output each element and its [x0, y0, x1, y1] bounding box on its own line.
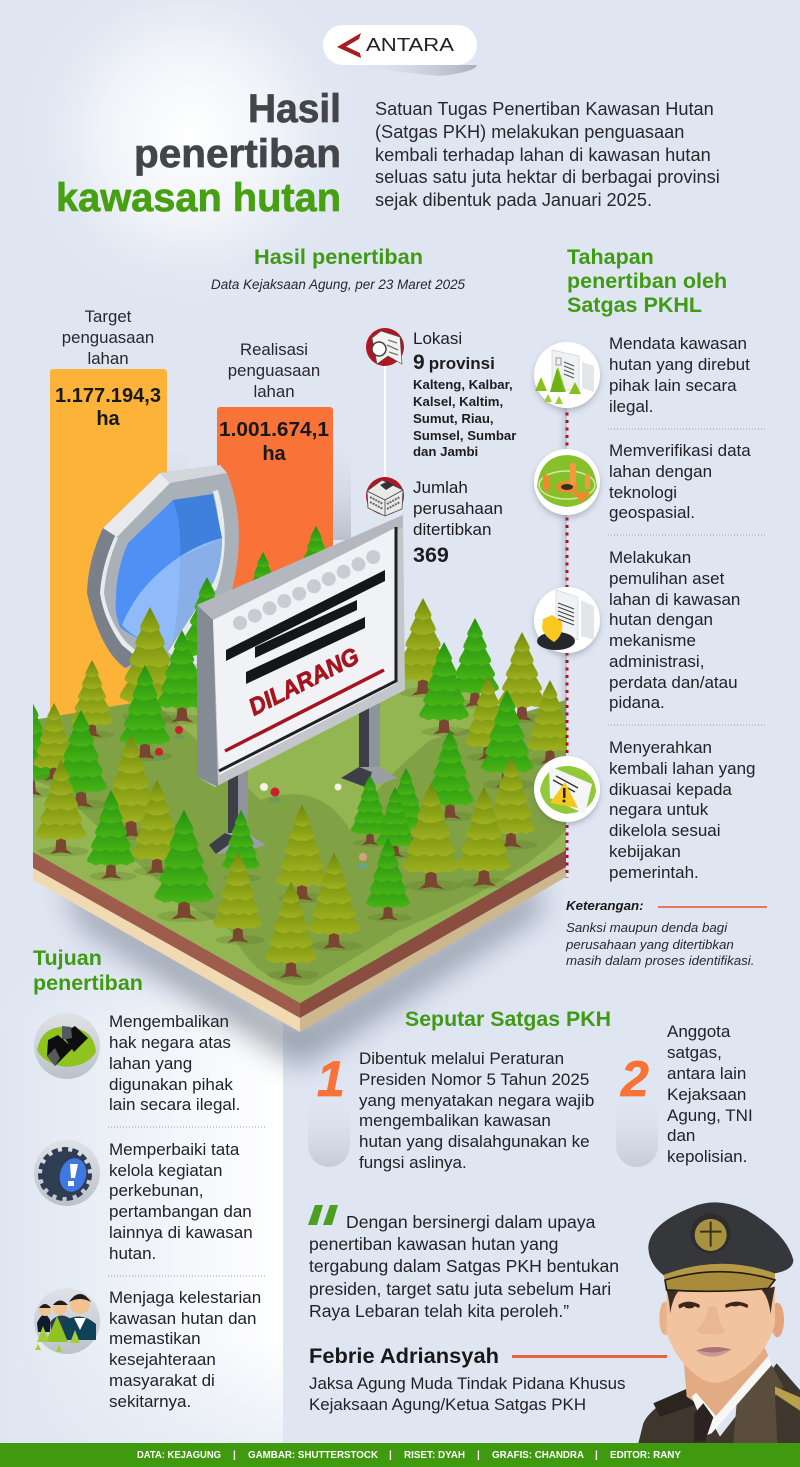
goal text: masyarakat di [109, 1371, 215, 1390]
intro text: (Satgas PKH) melakukan penguasaan [375, 122, 684, 142]
decorative column shadows [167, 405, 567, 735]
step text: Menyerahkan [609, 738, 712, 757]
trees in front of billboard [87, 768, 513, 980]
bar: realisasi: Realisasi [240, 340, 308, 359]
step text: teknologi [609, 483, 677, 502]
bar: target: penguasaan [62, 328, 154, 347]
text: lokasi: dan Jambi [413, 444, 478, 459]
goal text: lain secara ilegal. [109, 1095, 240, 1114]
intro text: seluas satu juta hektar di berbagai provinsi [375, 167, 720, 187]
heading: tujuan: Tujuan [33, 946, 102, 970]
note: keterangan: Keterangan: [566, 898, 644, 913]
icon: people and trees [34, 1288, 100, 1354]
step text: Mendata kawasan [609, 334, 747, 353]
step text: ilegal. [609, 397, 653, 416]
text: lokasi: Lokasi [413, 329, 462, 348]
step 4 [534, 738, 755, 882]
footer bar: RISET: DYAH [404, 1450, 465, 1461]
text: lokasi: Sumut, Riau, [413, 411, 494, 426]
step text: pemerintah. [609, 863, 699, 882]
icon: land blocks [34, 1013, 100, 1079]
goal text: kesejahteraan [109, 1350, 216, 1369]
heading: hasil penertiban: Data Kejaksaan Agung, per 23 Maret 2025 [211, 277, 465, 292]
step 1 [534, 334, 750, 416]
goal 2 [34, 1140, 253, 1263]
fact 1: Presiden Nomor 5 Tahun 2025 [359, 1070, 589, 1089]
bar: target: lahan [87, 349, 129, 368]
note: keterangan: perusahaan yang ditertibkan [565, 937, 734, 952]
footer bar: | [477, 1450, 480, 1461]
fact 2: kepolisian. [667, 1147, 747, 1166]
bar: realisasi [217, 340, 333, 647]
bar: realisasi: penguasaan [228, 361, 320, 380]
quote: tergabung dalam Satgas PKH bentukan [309, 1256, 619, 1276]
step text: perdata dan/atau [609, 673, 738, 692]
dotted timeline [566, 405, 568, 878]
ground shadow [60, 880, 540, 1068]
quote mark [308, 1205, 338, 1225]
icon: company building [366, 477, 404, 516]
speaker [309, 1345, 667, 1414]
step text: kebijakan [609, 842, 681, 861]
illustration: shield [87, 465, 239, 672]
heading: tahapan: Tahapan [567, 245, 654, 269]
icon: map location [366, 328, 404, 366]
heading: tujuan: penertiban [33, 971, 143, 995]
fact 1: mengembalikan kawasan [359, 1111, 551, 1130]
fact 2 [616, 1022, 753, 1167]
bar: target: Target [85, 307, 132, 326]
fact 1: fungsi aslinya. [359, 1153, 467, 1172]
text: lokasi [413, 329, 520, 459]
bar: target: 1.177.194,3 [55, 384, 161, 407]
step text: Melakukan [609, 548, 691, 567]
text: lokasi: Kalteng, Kalbar, [413, 377, 513, 392]
fact 2: Kejaksaan [667, 1085, 746, 1104]
note: keterangan: masih dalam proses identifikasi. [566, 953, 754, 968]
step text: Memverifikasi data [609, 441, 751, 460]
quote: Raya Lebaran telah kita peroleh.” [309, 1301, 569, 1321]
fact 2: 2 [620, 1051, 649, 1107]
text: lokasi: Sumsel, Sumbar [413, 428, 516, 443]
title [56, 87, 341, 220]
goal text: Mengembalikan [109, 1012, 229, 1031]
quote: presiden, target satu juta sebelum Hari [309, 1279, 611, 1299]
flowers [153, 726, 369, 869]
footer bar: | [389, 1450, 392, 1461]
step 3 [534, 548, 740, 712]
goal text: kawasan hutan dan [109, 1309, 256, 1328]
speaker: Kejaksaan Agung/Ketua Satgas PKH [309, 1395, 586, 1414]
bar: realisasi: lahan [253, 382, 295, 401]
text: jumlah perusahaan: Jumlah [413, 478, 468, 497]
bar: realisasi: 1.001.674,1 [219, 418, 329, 441]
goal text: digunakan pihak [109, 1075, 233, 1094]
goal text: perkebunan, [109, 1181, 204, 1200]
logo: Antara: ANTARA [366, 35, 454, 55]
goal text: lainnya di kawasan [109, 1223, 253, 1242]
step 2 [534, 441, 751, 522]
connector line [384, 360, 386, 485]
heading: tahapan: Satgas PKHL [567, 293, 702, 317]
icon: gear and alert [34, 1140, 100, 1206]
footer bar [0, 1443, 800, 1467]
quote [308, 1205, 619, 1321]
logo: Antara [323, 25, 477, 76]
icon: documents and trees [534, 342, 600, 408]
heading: tahapan: penertiban oleh [567, 269, 727, 293]
fact 1 [308, 1049, 594, 1172]
step text: pidana. [609, 693, 665, 712]
icon: document and shield [534, 587, 600, 653]
quote: Dengan bersinergi dalam upaya [346, 1212, 596, 1232]
text: jumlah perusahaan: perusahaan [413, 499, 503, 518]
fact 2: satgas, [667, 1043, 722, 1062]
step text: pihak lain secara [609, 376, 737, 395]
heading: hasil penertiban: Hasil penertiban [254, 245, 423, 269]
text: jumlah perusahaan: ditertibkan [413, 520, 491, 539]
title: kawasan hutan [56, 176, 341, 220]
step text: administrasi, [609, 652, 704, 671]
heading: seputar satgas: Seputar Satgas PKH [405, 1007, 611, 1031]
fact 1: hutan yang disalahgunakan ke [359, 1132, 590, 1151]
billboard posts [209, 690, 397, 854]
goal text: pertambangan dan [109, 1202, 252, 1221]
text: jumlah perusahaan: 369 [413, 543, 449, 567]
step text: hutan yang direbut [609, 355, 750, 374]
step text: negara untuk [609, 800, 709, 819]
trees behind billboard [4, 526, 575, 856]
step text: lahan di kawasan [609, 590, 740, 609]
fact 1: yang menyatakan negara wajib [359, 1091, 594, 1110]
intro text: Satuan Tugas Penertiban Kawasan Hutan [375, 99, 714, 119]
step text: dikuasai kepada [609, 780, 732, 799]
icon: geospatial [534, 449, 600, 515]
step text: hutan dengan [609, 610, 713, 629]
icon: warning [534, 756, 600, 822]
goal text: Menjaga kelestarian [109, 1288, 261, 1307]
bar: target: ha [96, 408, 121, 430]
fact 1: 1 [317, 1051, 345, 1107]
text: lokasi: Kalsel, Kaltim, [413, 394, 503, 409]
step text: kembali lahan yang [609, 759, 755, 778]
fact 2: Agung, TNI [667, 1106, 753, 1125]
footer bar: | [595, 1450, 598, 1461]
billboard text: DILARANG [244, 643, 364, 721]
step text: lahan dengan [609, 462, 712, 481]
fact 2: Anggota [667, 1022, 731, 1041]
note: keterangan [565, 898, 767, 968]
quote: penertiban kawasan hutan yang [309, 1234, 558, 1254]
goal text: lahan yang [109, 1054, 192, 1073]
goal 3 [34, 1288, 261, 1411]
step text: pemulihan aset [609, 569, 725, 588]
billboard [197, 515, 405, 854]
footer bar: GAMBAR: SHUTTERSTOCK [248, 1450, 379, 1461]
speaker: Jaksa Agung Muda Tindak Pidana Khusus [309, 1374, 625, 1393]
heading: hasil penertiban [211, 245, 465, 292]
goal text: sekitarnya. [109, 1392, 191, 1411]
text: jumlah perusahaan [413, 478, 503, 567]
text: lokasi: 9provinsi [413, 351, 495, 374]
bar: realisasi: ha [262, 443, 287, 465]
step text: mekanisme [609, 631, 696, 650]
step text: geospasial. [609, 503, 695, 522]
footer bar: GRAFIS: CHANDRA [492, 1450, 584, 1461]
goal text: hak negara atas [109, 1033, 231, 1052]
fact 2: dan [667, 1126, 695, 1145]
goal text: kelola kegiatan [109, 1161, 222, 1180]
goal text: Memperbaiki tata [109, 1140, 240, 1159]
portrait [638, 1202, 800, 1443]
fact 2: antara lain [667, 1064, 746, 1083]
ground layers [33, 676, 566, 1032]
footer bar: EDITOR: RANY [610, 1450, 681, 1461]
bar: target [50, 307, 167, 789]
note: keterangan: Sanksi maupun denda bagi [566, 920, 728, 935]
step text: dikelola sesuai [609, 821, 721, 840]
fact 1: Dibentuk melalui Peraturan [359, 1049, 564, 1068]
panel: left white backdrop [74, 992, 283, 1443]
speaker: Febrie Adriansyah [309, 1345, 499, 1368]
intro text: kembali terhadap lahan di kawasan hutan [375, 145, 711, 165]
goal text: hutan. [109, 1244, 156, 1263]
footer bar: | [233, 1450, 236, 1461]
illustration: forest scene [4, 515, 575, 1032]
intro text: sejak dibentuk pada Januari 2025. [375, 190, 652, 210]
goal text: memastikan [109, 1329, 201, 1348]
title: Hasil [248, 87, 341, 131]
goal 1 [34, 1012, 240, 1114]
footer bar: DATA: KEJAGUNG [137, 1450, 221, 1461]
title: penertiban [134, 132, 341, 176]
